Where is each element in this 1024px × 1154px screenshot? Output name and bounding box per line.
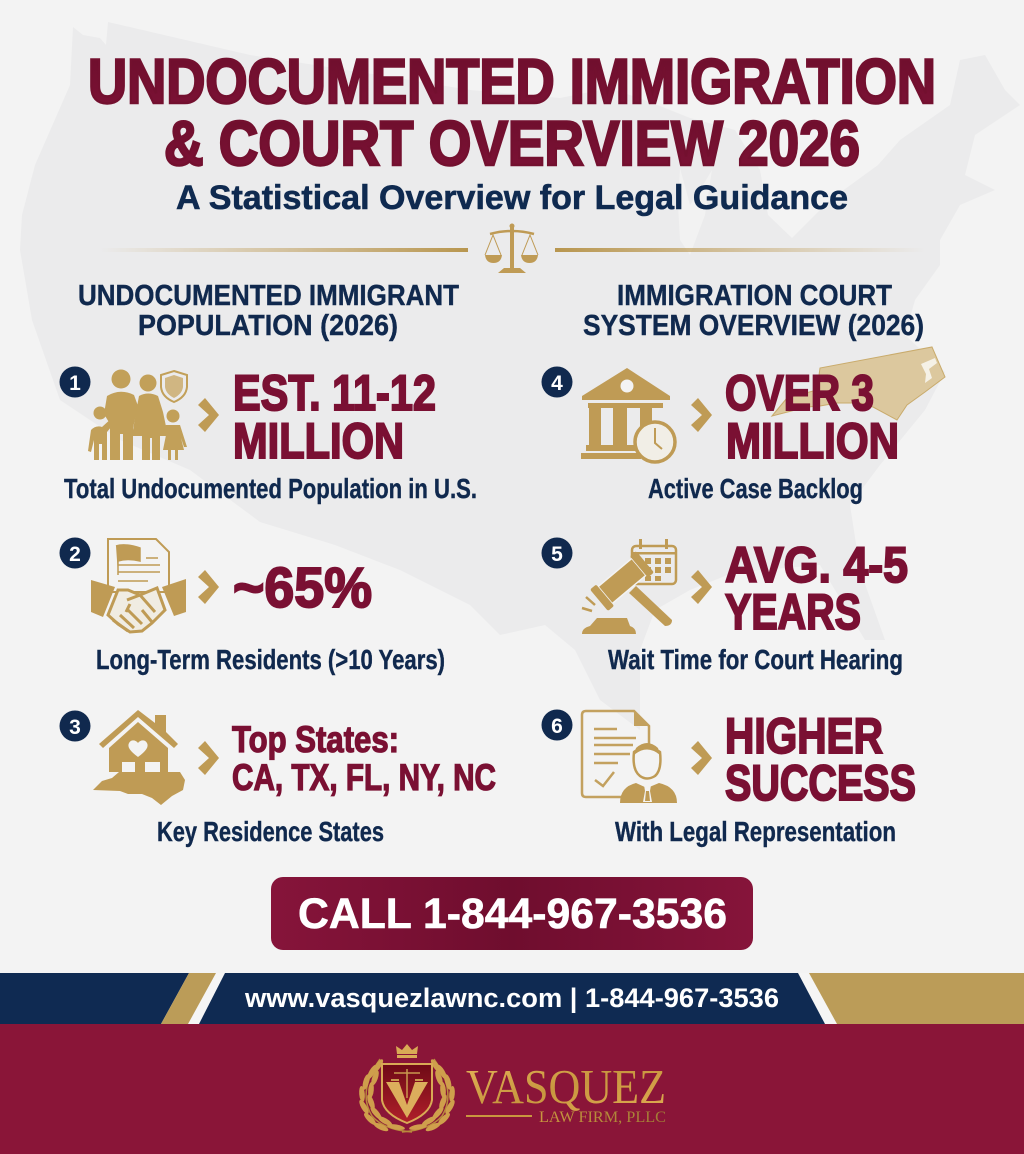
stat bbox=[725, 708, 916, 811]
badge 6: 6 bbox=[551, 715, 563, 738]
arrow bbox=[691, 570, 712, 604]
stat: Top States: bbox=[232, 719, 399, 760]
stat: CA, TX, FL, NY, NC bbox=[232, 757, 496, 798]
lake michigan light patch bbox=[678, 168, 712, 255]
stat: SUCCESS bbox=[725, 755, 916, 811]
stat: HIGHER bbox=[725, 708, 883, 764]
arrow bbox=[691, 741, 712, 775]
heading: right column: IMMIGRATION COURT bbox=[617, 280, 893, 312]
icon: gavel and calendar bbox=[582, 539, 676, 634]
badge 4 bbox=[542, 366, 572, 398]
caption: Total Undocumented Population in U.S. bbox=[64, 473, 477, 504]
stat: MILLION bbox=[726, 413, 899, 469]
icon: shield with V bbox=[382, 1064, 432, 1123]
badge 2 bbox=[60, 538, 90, 568]
item 4: case backlog bbox=[542, 365, 899, 504]
icon: right laurel branch bbox=[402, 1058, 456, 1133]
divider with scales icon bbox=[100, 224, 925, 273]
stat bbox=[725, 365, 899, 469]
stat: OVER 3 bbox=[725, 365, 874, 421]
caption: Key Residence States bbox=[157, 816, 384, 847]
footer panel bbox=[0, 1024, 1024, 1154]
caption: Long-Term Residents (>10 Years) bbox=[96, 644, 445, 675]
icon: family with shield bbox=[88, 370, 187, 460]
item 2: long-term residents bbox=[60, 538, 445, 675]
icon: document and attorney bbox=[582, 711, 677, 803]
arrow bbox=[691, 398, 712, 432]
heading: left column bbox=[78, 280, 460, 342]
heading: right column bbox=[583, 280, 924, 342]
badge 2: 2 bbox=[69, 543, 81, 566]
item 1: total population bbox=[60, 365, 477, 504]
badge 3 bbox=[60, 710, 90, 742]
stat: ~65% bbox=[233, 556, 372, 620]
contact band: www.vasquezlawnc.com | 1-844-967-3536 bbox=[244, 983, 779, 1013]
logo: LAW FIRM, PLLC bbox=[539, 1109, 666, 1126]
icon: crown bbox=[396, 1044, 418, 1058]
icon: house with heart and NC map bbox=[93, 710, 185, 805]
icon: document and handshake bbox=[91, 539, 186, 632]
arrow bbox=[198, 741, 219, 775]
stat bbox=[232, 719, 496, 798]
stat bbox=[725, 537, 908, 640]
item 6: legal representation bbox=[542, 708, 916, 847]
heading: right column: SYSTEM OVERVIEW (2026) bbox=[583, 310, 924, 342]
stat: MILLION bbox=[233, 413, 404, 469]
heading: left column: POPULATION (2026) bbox=[138, 310, 398, 342]
logo wordmark: VASQUEZ bbox=[466, 1059, 666, 1114]
caption: Active Case Backlog bbox=[648, 473, 863, 504]
stat: EST. 11-12 bbox=[233, 365, 436, 421]
badge 5 bbox=[542, 538, 572, 568]
icon: courthouse with clock bbox=[581, 368, 675, 462]
badge 4: 4 bbox=[551, 372, 563, 395]
badge 1: 1 bbox=[69, 372, 81, 395]
item 5: wait time bbox=[542, 537, 908, 675]
contact band bbox=[0, 973, 1024, 1024]
North Carolina map accent bbox=[772, 347, 945, 420]
badge 6 bbox=[542, 710, 572, 740]
title bbox=[88, 47, 936, 179]
background US map silhouette bbox=[20, 22, 1020, 730]
badge 3: 3 bbox=[69, 716, 81, 739]
stat bbox=[233, 365, 436, 469]
heading: left column: UNDOCUMENTED IMMIGRANT bbox=[78, 280, 460, 312]
caption: Wait Time for Court Hearing bbox=[608, 644, 903, 675]
arrow bbox=[198, 398, 219, 432]
title: & COURT OVERVIEW 2026 bbox=[164, 109, 860, 179]
item 3: top states bbox=[60, 710, 496, 847]
caption: With Legal Representation bbox=[615, 816, 896, 847]
call button: CALL 1-844-967-3536 bbox=[298, 890, 727, 938]
subtitle: A Statistical Overview for Legal Guidance bbox=[176, 179, 848, 217]
arrow bbox=[198, 570, 219, 604]
stat: YEARS bbox=[725, 584, 861, 640]
badge 5: 5 bbox=[551, 543, 563, 566]
badge 1 bbox=[60, 366, 90, 398]
call button bbox=[271, 877, 753, 950]
stat: AVG. 4-5 bbox=[725, 537, 908, 593]
icon: left laurel branch bbox=[358, 1058, 412, 1133]
logo bbox=[358, 1044, 666, 1133]
